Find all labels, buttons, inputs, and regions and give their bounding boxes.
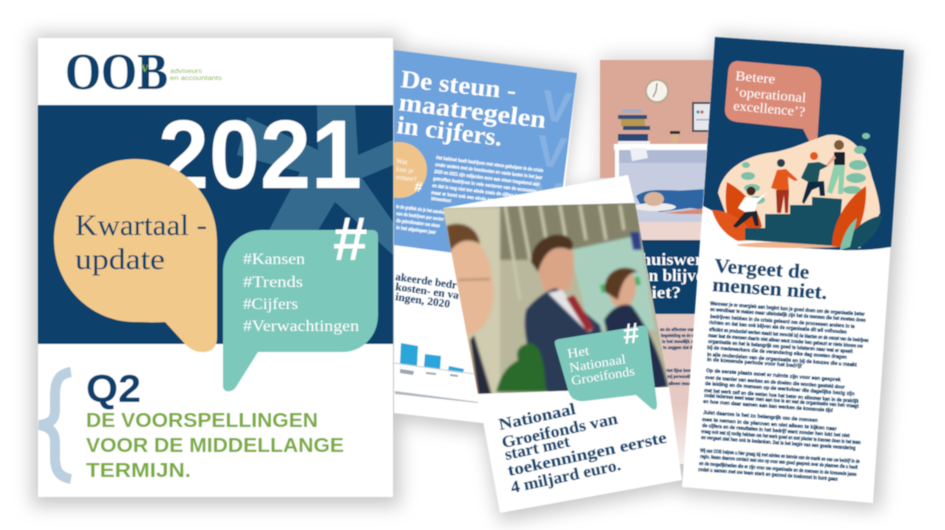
intro text on blue: onder andere met de loonkosten en vaste lasten in het jaar — [435, 162, 543, 181]
watermark letters — [534, 90, 572, 192]
body text paragraphs: vraag ook wat zij nodig hebben om het werk goed en met plezier te kunnen doen in het team — [701, 429, 861, 446]
small text on pink: en de effecten van de — [660, 327, 701, 332]
callout: hashtags: #Verwachtingen — [243, 318, 359, 335]
body text paragraphs: in alle onderdelen van de organisatie en bij de keuzes die u maakt — [707, 352, 857, 368]
callout: operational excellence: Betere — [735, 68, 776, 86]
person: right man — [604, 268, 668, 392]
chart heading: akeerde bedr — [395, 271, 458, 292]
badge: orange circle: ermee? — [396, 173, 417, 183]
body text paragraphs: bedrijven hebben in de crisis geleerd om de processen anders in te — [710, 314, 855, 330]
intro text on blue — [396, 155, 544, 236]
callout: hashtags: #Kansen — [243, 251, 305, 268]
body text paragraphs: in de komende periode voor het bedrijf — [707, 357, 802, 370]
person: centre man — [523, 233, 603, 392]
intro text on blue: getroffen bedrijven in vele sectoren van de economie — [433, 176, 537, 195]
intro text on blue: 2020 en 2021 zijn miljarden euro aan steun toegekend aan — [434, 169, 540, 188]
right leaves — [832, 186, 883, 250]
photo: three men — [440, 200, 680, 398]
callout: hashtags — [223, 205, 378, 391]
callout: Kwartaal-update — [54, 159, 217, 352]
body text paragraphs: richten en dat kan ook blijven als de organisatie dit wil volhouden — [709, 320, 847, 336]
logo: OOB: v — [141, 60, 149, 76]
title: 2021: 2021 — [158, 100, 362, 209]
heading: Q2: Q2 — [86, 368, 141, 411]
callout: Het Nationaal Groeifonds: # — [621, 317, 641, 351]
badge: orange circle: # — [414, 178, 424, 195]
plant — [496, 343, 546, 392]
heading: De steunmaatregelen: De steun - — [399, 66, 518, 105]
callout: hashtags: #Trends — [243, 274, 303, 291]
icon: coffee cup — [670, 131, 680, 143]
background star shape — [237, 105, 393, 255]
badge: orange circle: Wat — [396, 157, 408, 166]
body text paragraphs: over de manier van werken en de doelen die worden gesteld door — [705, 375, 846, 391]
heading: Vergeet de mensen niet: mensen niet. — [712, 274, 828, 304]
badge: orange circle: kun je — [396, 165, 414, 175]
watermark letters: V — [534, 126, 570, 179]
callout: hashtags: # — [333, 205, 367, 274]
icon: clock — [646, 80, 668, 102]
body text paragraphs — [698, 301, 869, 483]
body text paragraphs: en hoe men daar samen aan kan werken de komende tijd — [703, 399, 833, 414]
heading: Vergeet de mensen niet: Vergeet de — [714, 255, 810, 284]
callout: operational excellence — [725, 61, 821, 149]
left fern — [741, 162, 765, 204]
heading: leaflet title — [497, 399, 668, 497]
heading: leaflet title: toekenningen eerste — [506, 428, 668, 480]
callout: operational excellence: ‘operational — [734, 84, 807, 105]
right fern — [843, 133, 870, 194]
small text on pink — [660, 327, 704, 386]
logo: OOB: en accountants — [170, 75, 223, 82]
small text on pink: mij persoonlijk in de — [667, 374, 704, 379]
callout: Kwartaal-update: update — [75, 243, 165, 276]
desk with sleeping person — [614, 144, 725, 240]
body text paragraphs: met het werk zelf en die weten hoe het beter en slimmer kan in de praktijk — [704, 388, 859, 405]
intro text on blue: en dat is nog niet ten einde zoals de cijfers laten zien — [432, 183, 534, 201]
illustration: team climbing stairs — [712, 133, 883, 250]
body text paragraphs: Juist daarom is het zo belangrijk om de mensen — [703, 410, 818, 424]
heading: De steunmaatregelen: in cijfers. — [395, 112, 504, 152]
callout: hashtags: #Cijfers — [243, 296, 298, 313]
body text paragraphs: de leiding en de mensen op de werkvloer die dagelijks bezig zijn — [705, 381, 855, 397]
heading: huiswerk — [641, 250, 714, 302]
cover: Kwartaalupdate 2021 — [38, 38, 393, 497]
body text paragraphs: zodat u samen met uw team sterk en gezond de toekomst in kunt gaan — [698, 467, 838, 483]
body text paragraphs: efficiënt en productief werken maakt het verschil bij de klanten en de omzet van de bedrijven — [709, 327, 869, 344]
callout: Kwartaal-update: Kwartaal - — [75, 209, 207, 242]
watermark letters: V — [539, 81, 575, 134]
callout: Het Nationaal Groeifonds: Groeifonds — [570, 363, 636, 388]
person: man in teal — [801, 152, 828, 204]
heading: huiswerk: niet? — [641, 283, 681, 302]
body text paragraphs: Op de eerste plaats moet er ruimte zijn voor een gesprek — [706, 368, 841, 383]
person: woman in black — [826, 140, 845, 194]
callout: Het Nationaal Groeifonds: Nationaal — [568, 351, 627, 375]
intro text on blue: van de bedrijven per sector — [396, 211, 444, 223]
bar chart — [394, 343, 478, 403]
intro text on blue: die gebruikmaken van steun — [396, 218, 440, 229]
heading: huiswerk: en blijven — [641, 266, 714, 285]
small text on pink: Het fijne leven van — [666, 368, 702, 373]
icon: stack of books — [618, 109, 650, 144]
body text paragraphs: regio. Neem daarom contact met ons op voor een goed gesprek over de plannen die u heeft — [700, 454, 858, 471]
small text on pink: te zeggen dat dit niet — [663, 345, 704, 350]
body text paragraphs: en wendbaar te maken maar uiteindelijk zijn het de mensen die het moeten doen — [710, 307, 866, 324]
body text paragraphs: maar laat de mensen daarin niet alleen want zonder hen gebeurt er niets binnen uw — [708, 333, 863, 350]
subtitle: De voorspellingen — [86, 410, 344, 482]
person: woman on first step — [733, 186, 768, 228]
watermark letters: V — [529, 171, 565, 224]
heading: De steunmaatregelen: maatregelen — [397, 89, 548, 134]
icon: picture frame — [692, 102, 720, 132]
chart heading — [395, 271, 460, 311]
body text paragraphs: organisatie en het is belangrijk om goed te luisteren naar wat er speelt — [708, 339, 853, 355]
left leaves — [712, 182, 762, 241]
intro text on blue: In de grafiek zie je het aandeel — [396, 204, 447, 216]
heading: leaflet title: start met — [503, 431, 572, 464]
heading: leaflet title: Nationaal — [497, 399, 578, 434]
chart heading: kosten- en va — [395, 281, 460, 302]
leaflet: Nationaal Groeifonds — [440, 175, 682, 513]
intro text on blue: Het kabinet heeft bedrijven met steun geholpen in de crisis — [436, 155, 544, 174]
icon: curly bracket — [39, 372, 71, 479]
stairs — [745, 197, 842, 246]
subtitle: De voorspellingen: TERMIJN. — [86, 460, 191, 482]
logo: OOB: OOB — [65, 44, 168, 101]
body text paragraphs: de cijfers en de resultaten in het bedrijf want zonder hen lukt het niet — [702, 423, 850, 439]
subtitle: De voorspellingen: VOOR DE MIDDELLANGE — [86, 435, 344, 457]
heading: De steunmaatregelen — [395, 66, 548, 152]
body text paragraphs: mee te nemen in de plannen en niet alleen te kijken naar — [702, 417, 838, 432]
logo: OOB: adviseurs — [170, 68, 203, 75]
body text paragraphs: en vergeet niet hen ook te bedanken. Dat is het begin van een goede verandering — [701, 435, 856, 452]
intro text on blue: maar er komt ook een einde aan deze maatregelen — [431, 190, 531, 208]
heading: huiswerk: huiswerk — [641, 250, 714, 269]
callout: Het Nationaal Groeifonds — [555, 317, 657, 410]
heading: leaflet title: Groeifonds van — [500, 409, 619, 452]
body text paragraphs: Wij van OOB helpen u hier graag bij met advies en kennis van de markt en van uw bedrijf in de — [700, 448, 860, 465]
subtitle: De voorspellingen: DE VOORSPELLINGEN — [86, 410, 318, 432]
person: left man — [446, 224, 494, 395]
heading: leaflet title: 4 miljard euro. — [509, 455, 622, 497]
intro text on blue: binnenkort — [431, 196, 452, 204]
body text paragraphs: Wanneer je er energiek aan begint kun je goed doen om de organisatie beter — [710, 301, 866, 318]
callout: operational excellence: excellence’? — [733, 98, 806, 119]
page: huiswerk (pink) — [600, 60, 725, 464]
body text paragraphs: en de mogelijkheden die er zijn voor uw organisatie en de mensen in de komende jaren — [699, 461, 857, 478]
intro text on blue: in het afgelopen jaar — [396, 225, 436, 236]
small text on pink: begeleiding en de steun — [661, 333, 701, 338]
callout: Het Nationaal Groeifonds: Het — [566, 343, 591, 361]
small text on pink: is het moeilijk om te — [662, 339, 703, 344]
small text on pink: alleen maar goed — [668, 381, 704, 386]
chart heading: ingen, 2020 — [395, 291, 451, 311]
heading: Vergeet de mensen niet — [712, 255, 828, 304]
person: man in orange — [771, 159, 798, 213]
body text paragraphs: zodat iedereen weet waar men aan toe is en wat de organisatie van hen vraagt — [704, 393, 859, 410]
badge: orange circle — [371, 142, 427, 198]
page: steunmaatregelen in cijfers — [371, 50, 577, 423]
body text paragraphs: bij de medewerkers die de verandering elke dag moeten dragen — [707, 345, 847, 361]
brochure: Vergeet de mensen niet — [682, 37, 904, 503]
